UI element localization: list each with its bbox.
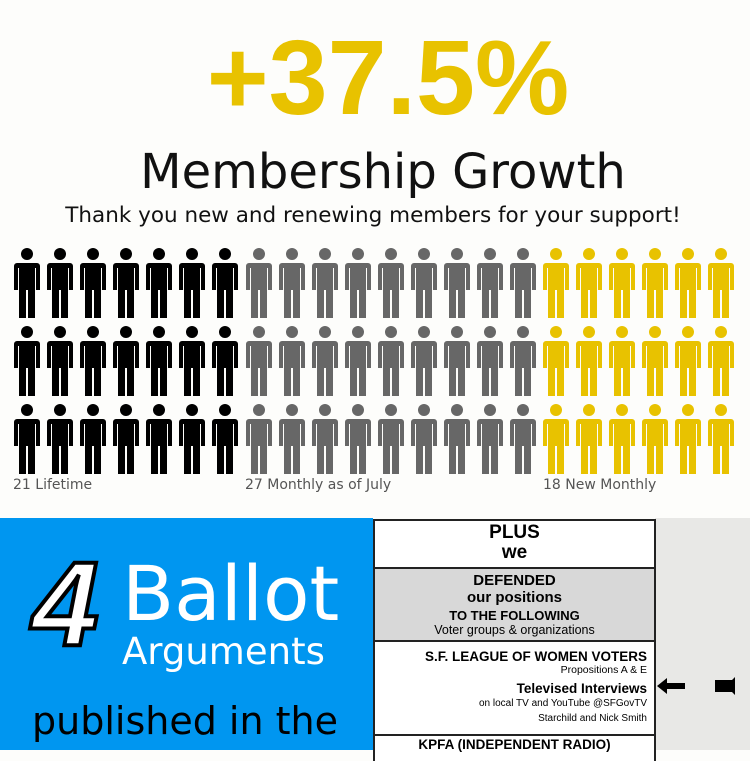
title: +37.5%: +37.5% xyxy=(207,19,569,137)
published text: published in the xyxy=(32,699,338,743)
league entry: S.F. LEAGUE OF WOMEN VOTERS xyxy=(425,649,647,664)
league entry xyxy=(375,642,654,736)
league entry: Televised Interviews xyxy=(517,681,647,696)
pictogram chart: 18 New Monthly xyxy=(543,477,656,493)
big 4: 4 xyxy=(32,537,99,671)
pictogram chart xyxy=(13,248,734,493)
pictogram chart: 27 Monthly as of July xyxy=(245,477,391,493)
defended xyxy=(375,569,654,642)
arrow xyxy=(657,677,735,695)
league entry: Propositions A & E xyxy=(561,664,647,676)
Ballot: Ballot xyxy=(122,549,339,638)
defended: our positions xyxy=(467,589,562,606)
defended: Voter groups & organizations xyxy=(434,623,595,637)
defended: TO THE FOLLOWING xyxy=(449,608,580,623)
PLUS we xyxy=(375,521,654,569)
league entry: on local TV and YouTube @SFGovTV xyxy=(479,698,647,709)
panel: right grey xyxy=(655,518,750,750)
defended: DEFENDED xyxy=(473,572,556,589)
panel: defended list xyxy=(373,519,656,761)
PLUS we: we xyxy=(502,542,527,563)
league entry: Starchild and Nick Smith xyxy=(538,713,647,724)
subtitle: Thank you new and renewing members for your support! xyxy=(65,203,681,228)
panel: ballot arguments xyxy=(0,518,373,750)
KPFA: KPFA (INDEPENDENT RADIO) xyxy=(418,737,611,752)
pictogram chart: 21 Lifetime xyxy=(13,477,92,493)
PLUS we: PLUS xyxy=(489,522,540,543)
heading: Membership Growth: Membership Growth xyxy=(140,144,626,200)
Arguments: Arguments xyxy=(122,630,325,673)
